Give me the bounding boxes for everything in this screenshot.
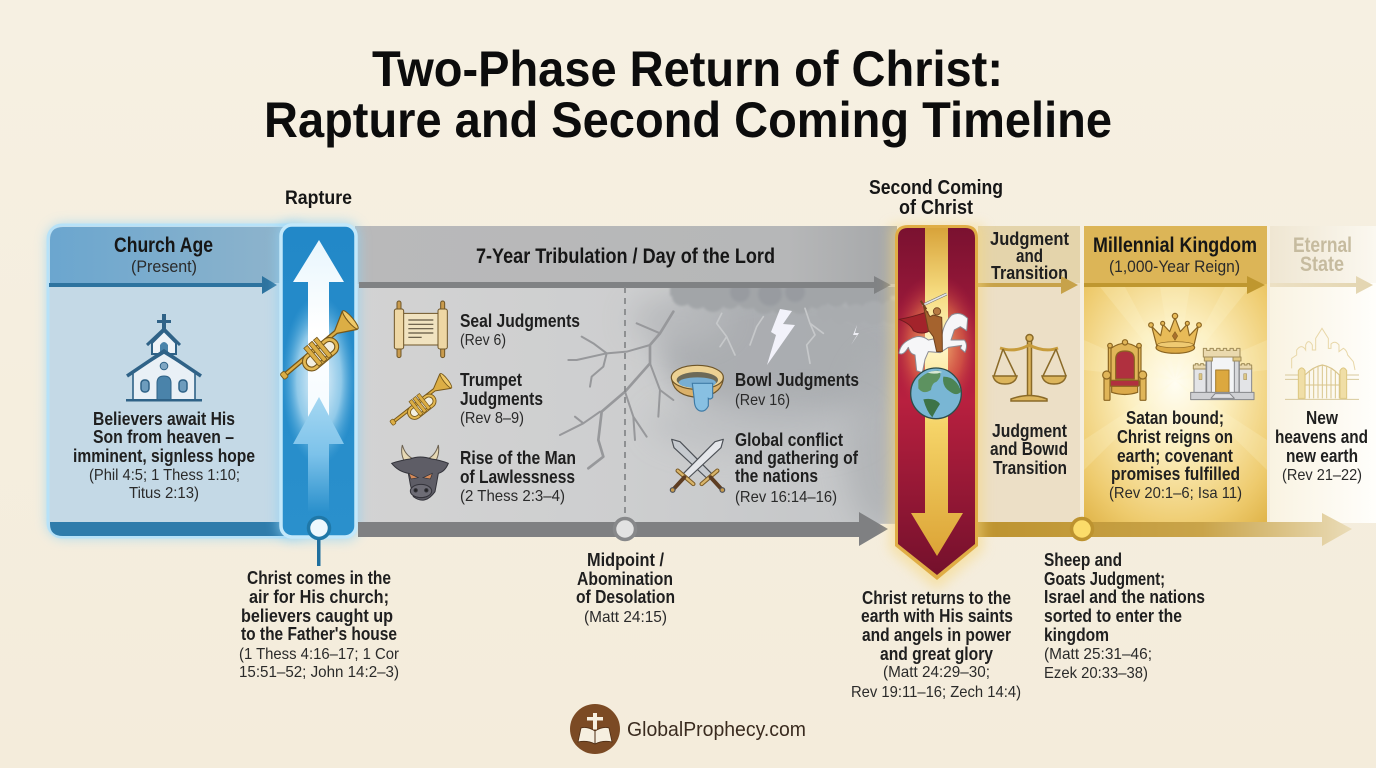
text: seal judgments: Seal Judgments [460,311,580,331]
glow behind rider [898,283,975,390]
icon: rapture trumpet [275,309,362,389]
arrow: millennial [1084,276,1265,294]
icon: throne [1103,340,1147,400]
arrow: gold timeline [978,513,1352,546]
text: second coming description: earth with His saints [861,606,1013,626]
text: millennial body: Christ reigns on [1117,427,1233,447]
heading: judgment and transition: and [1016,246,1043,266]
logo: bible and cross [570,704,620,754]
text: second coming description [851,588,1021,701]
text: seal judgments: (Rev 6) [460,332,506,349]
panel: eternal state [1270,226,1376,523]
heading: church age: (Present) [131,257,197,276]
text: believers await: Believers await His [93,409,235,429]
text: bowl judgments: (Rev 16) [735,392,790,409]
text: seal judgments [460,311,580,349]
heading: church age: Church Age [114,234,213,257]
text: eternal body: new earth [1286,446,1358,466]
text: rapture description: Christ comes in the [247,568,391,588]
text: bowl judgments [735,370,859,409]
text: believers await: (Phil 4:5; 1 Thess 1:10; [89,467,240,484]
text: midpoint: Abomination [577,569,673,589]
text: trumpet judgments [460,370,543,427]
storm clouds [669,287,895,313]
icon: eternal city [1285,328,1359,399]
lightning cracks [560,308,823,468]
storm background [634,295,895,523]
panel: tribulation [355,226,920,530]
icon: swords [670,439,725,492]
second coming banner [890,225,983,590]
text: man of lawlessness: of Lawlessness [460,467,575,487]
text: believers await: imminent, signless hope [73,446,255,466]
arrow: descending [911,228,963,556]
heading: second coming [869,177,1003,219]
panel: judgment and transition [978,226,1080,523]
text: millennial body: earth; covenant [1117,446,1233,466]
text: second coming description: and great glory [880,644,993,664]
text: global conflict: Global conflict [735,430,843,450]
arrow: tribulation bottom [358,512,888,546]
text: millennial body: promises fulfilled [1111,464,1240,484]
text: eternal body: (Rev 21–22) [1282,467,1362,484]
arrow: church age [49,276,277,294]
text: midpoint [576,550,675,626]
title: Two-Phase Return of Christ: [372,41,1003,97]
text: sheep and goats: sorted to enter the [1044,606,1182,626]
icon: church [126,314,202,402]
text: believers await: Titus 2:13) [129,485,199,502]
heading: millennial kingdom [1093,234,1257,276]
heading: eternal state: Eternal [1293,234,1352,257]
dashed midpoint line [624,287,626,518]
arrow: lower rapture [293,397,344,512]
heading: second coming: of Christ [899,197,973,219]
text: second coming description: and angels in power [862,625,1011,645]
icon: small lightning bolt [851,325,859,345]
footer: site name: GlobalProphecy.com [627,719,806,741]
milestone: sheep and goats [1072,518,1092,540]
panel: millennial kingdom [1084,226,1267,523]
text: global conflict: (Rev 16:14–16) [735,489,837,506]
text: eternal body: New [1306,408,1339,428]
text: bowl judgments: Bowl Judgments [735,370,859,390]
text: rapture description: 15:51–52; John 14:2–3) [239,664,399,681]
icon: crown [1149,313,1201,353]
text: judgment body [990,421,1068,478]
icon: globe [911,368,961,419]
church age panel [47,224,309,538]
heading: millennial kingdom: (1,000-Year Reign) [1109,257,1240,276]
text: second coming description: Rev 19:11–16; Zech 14:4) [851,684,1021,701]
arrow: eternal [1270,276,1373,294]
text: trumpet judgments: Trumpet [460,370,522,390]
heading: millennial kingdom: Millennial Kingdom [1093,234,1257,257]
rapture column [275,222,362,540]
text: millennial body: (Rev 20:1–6; Isa 11) [1109,485,1242,502]
icon: rider on white horse [899,294,968,373]
text: midpoint: of Desolation [576,587,675,607]
text: judgment body: and Bowıd [990,439,1068,459]
text: sheep and goats [1044,550,1205,682]
heading: church age [114,234,213,276]
text: sheep and goats: Goats Judgment; [1044,569,1165,589]
text: sheep and goats: Sheep and [1044,550,1122,570]
text: trumpet judgments: (Rev 8–9) [460,410,524,427]
arrow: tribulation top [359,276,891,294]
milestone: rapture node [308,518,330,566]
text: midpoint: Midpoint / [587,550,664,570]
heading: judgment and transition: Transition [991,263,1068,283]
text: rapture description: air for His church; [249,587,389,607]
text: sheep and goats: Israel and the nations [1044,587,1205,607]
heading: eternal state [1293,234,1352,276]
text: second coming description: Christ returns to the [862,588,1011,608]
heading: rapture: Rapture [285,187,352,209]
text: midpoint: (Matt 24:15) [584,609,667,626]
text: judgment body: Transition [993,458,1067,478]
icon: scroll [394,301,447,358]
icon: beast [392,445,448,500]
heading: eternal state: State [1300,253,1344,276]
icon: trumpet [386,372,455,433]
text: trumpet judgments: Judgments [460,389,543,409]
text: millennial body: Satan bound; [1126,408,1224,428]
heading: tribulation: 7-Year Tribulation / Day of the Lord [476,245,775,268]
text: rapture description: (1 Thess 4:16–17; 1 Cor [239,646,400,663]
heading: judgment and transition [990,229,1069,283]
text: sheep and goats: kingdom [1044,625,1109,645]
text: believers await [73,409,255,502]
arrow: upper rapture [293,240,344,420]
title [264,41,1112,148]
text: global conflict [735,430,859,506]
arrow: judgment [978,276,1078,294]
title: Rapture and Second Coming Timeline [264,92,1112,148]
heading: judgment and transition: Judgment [990,229,1069,249]
text: man of lawlessness [460,448,576,505]
text: man of lawlessness: Rise of the Man [460,448,576,468]
text: man of lawlessness: (2 Thess 2:3–4) [460,488,565,505]
text: global conflict: and gathering of [735,448,859,468]
heading: second coming: Second Coming [869,177,1003,199]
icon: bowl [671,365,723,411]
text: rapture description: believers caught up [241,606,393,626]
milestone: midpoint [614,518,636,540]
text: judgment body: Judgment [992,421,1067,441]
text: rapture description [239,568,400,681]
text: believers await: Son from heaven – [93,427,234,447]
text: rapture description: to the Father's house [241,624,397,644]
icon: lightning bolt [767,309,795,365]
icon: scales [993,334,1066,401]
text: sheep and goats: (Matt 25:31–46; [1044,646,1152,663]
text: sheep and goats: Ezek 20:33–38) [1044,665,1148,682]
text: millennial body [1109,408,1242,502]
text: global conflict: the nations [735,466,818,486]
text: eternal body [1275,408,1368,484]
icon: temple [1191,348,1254,400]
text: second coming description: (Matt 24:29–30; [883,664,990,681]
